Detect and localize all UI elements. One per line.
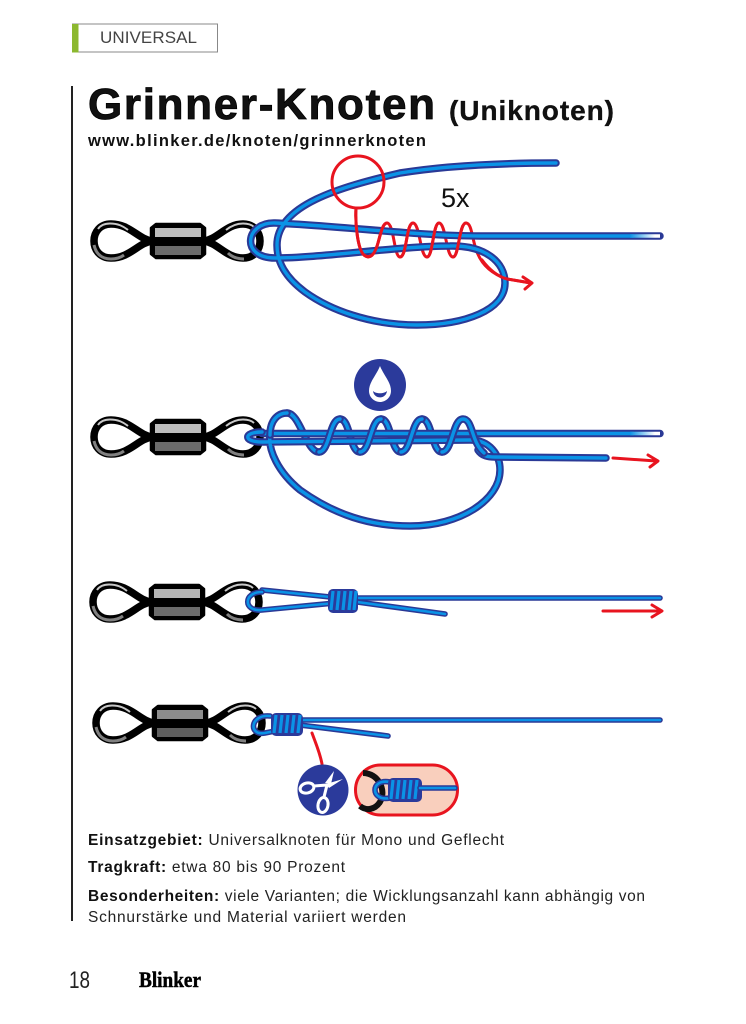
scissors icon bbox=[298, 764, 348, 816]
title bbox=[88, 80, 614, 129]
back of coil bbox=[287, 413, 442, 452]
swivel 2 bbox=[94, 420, 260, 455]
knot coils bbox=[328, 589, 358, 613]
category tag: UNIVERSAL bbox=[72, 24, 218, 52]
red wrap, front segments bbox=[356, 208, 466, 257]
step 4 diagram bbox=[96, 706, 660, 816]
Tragkraft line: Tragkraft: etwa 80 bis 90 Prozent bbox=[88, 859, 346, 876]
Einsatzgebiet line: Einsatzgebiet: Universalknoten für Mono und Geflecht bbox=[88, 832, 505, 849]
red pull arrow bbox=[603, 605, 662, 617]
swivel 3 bbox=[93, 584, 259, 620]
step 3 diagram bbox=[93, 584, 662, 620]
swivel 4 bbox=[96, 706, 262, 741]
hook around ring bbox=[254, 716, 275, 733]
info text block bbox=[88, 832, 645, 926]
red pull arrow bbox=[482, 260, 532, 289]
swivel 1 bbox=[94, 224, 260, 259]
standing line and inner strand bbox=[248, 432, 660, 526]
front of coil bbox=[270, 413, 484, 453]
step 1 diagram bbox=[94, 156, 660, 325]
red pull arrow bbox=[613, 455, 658, 467]
knot coils bbox=[271, 713, 303, 736]
category tag: UNIVERSAL: UNIVERSAL bbox=[100, 28, 197, 47]
tail end bbox=[478, 450, 606, 458]
Besonderheiten lines: Schnurstärke und Material variiert werden bbox=[88, 909, 406, 926]
URL line: www.blinker.de/knoten/grinnerknoten bbox=[87, 132, 426, 150]
red wrap path, behind the line bbox=[356, 208, 531, 283]
page number: 18 bbox=[69, 967, 90, 994]
title: (Uniknoten) bbox=[449, 95, 614, 126]
Besonderheiten lines: Besonderheiten: viele Varianten; die Wicklungsanzahl kann abhängig von bbox=[88, 888, 645, 905]
red circle marker bbox=[332, 156, 384, 208]
step 2 diagram bbox=[94, 359, 660, 526]
title: Grinner-Knoten bbox=[88, 80, 435, 129]
line and tail bbox=[248, 590, 660, 614]
blue line with loop bbox=[251, 163, 660, 325]
water drop icon bbox=[354, 359, 406, 411]
Blinker logo wordmark: Blinker bbox=[139, 967, 201, 992]
left vertical rule bbox=[71, 86, 73, 921]
line and tail bbox=[295, 720, 660, 736]
detail pill bbox=[356, 765, 458, 815]
Besonderheiten lines bbox=[88, 888, 645, 926]
red pointer line bbox=[312, 733, 322, 764]
label: 5x: 5x bbox=[441, 183, 470, 213]
